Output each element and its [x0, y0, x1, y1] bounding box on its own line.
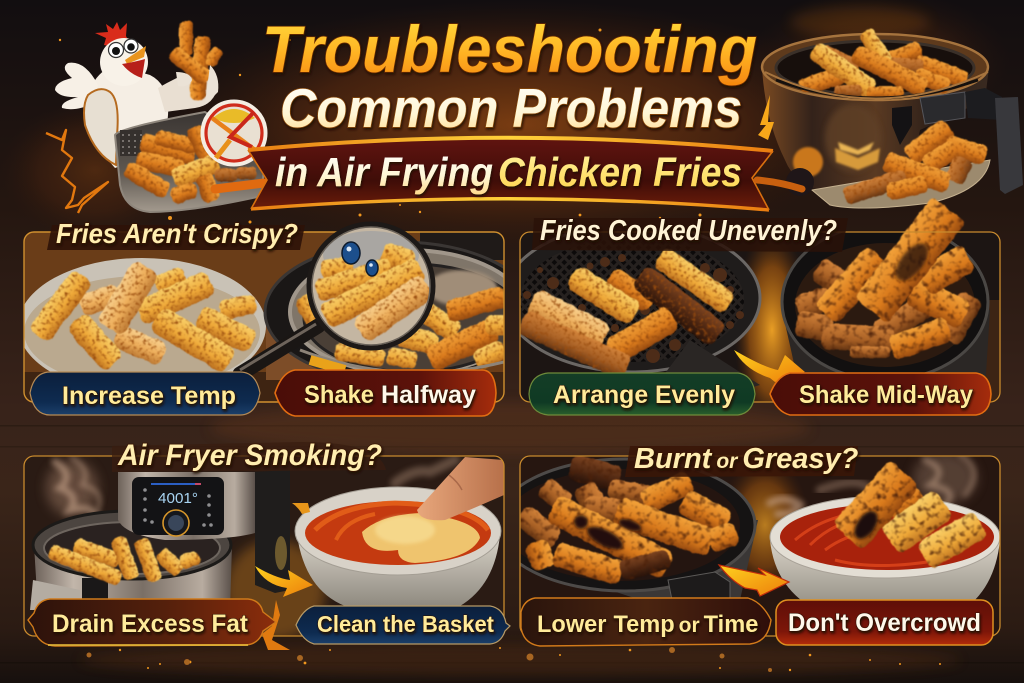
fire glow [738, 252, 796, 402]
smoke and glow [790, 6, 930, 38]
label: lower temp or time: Lower TemporTime [537, 612, 758, 638]
title: Troubleshooting [262, 12, 757, 86]
icon: prohibition sign [201, 100, 267, 166]
label: don't overcrowd: Don't Overcrowd [788, 609, 981, 637]
fries on plate [28, 260, 258, 374]
arrow: top to bowl [292, 503, 310, 514]
burnt fry ball on stick [757, 147, 823, 196]
tray [115, 112, 265, 212]
window reflection [825, 104, 881, 172]
arrow [734, 350, 805, 382]
panel image [520, 232, 1000, 402]
smoke [770, 452, 977, 514]
plate [812, 160, 990, 208]
label: increase temp [30, 372, 260, 415]
small arrow under label [262, 600, 290, 650]
bowl fries [832, 460, 988, 569]
label: arrange evenly [529, 373, 755, 415]
right column [255, 470, 290, 593]
bowl [295, 487, 501, 606]
label: arrange evenly: Arrange Evenly [553, 381, 735, 409]
heading: air fryer smoking: Air Fryer Smoking? [117, 439, 382, 472]
magnifier [240, 224, 435, 374]
banner text: Chicken Fries [498, 149, 742, 195]
steam from fryer [46, 458, 100, 516]
label: shake halfway: Halfway [381, 381, 476, 409]
stick left [215, 183, 264, 189]
basket bottom rim [300, 350, 504, 373]
label: shake halfway: Shake [304, 381, 374, 409]
steam behind bowl [395, 460, 455, 483]
label: shake halfway [275, 370, 496, 416]
spark bolt [758, 95, 774, 140]
label: drain excess fat: Drain Excess Fat [52, 610, 249, 638]
handle [892, 88, 1023, 194]
arrow: fryer to bowl [255, 566, 313, 597]
control head [118, 472, 255, 540]
banner [248, 138, 773, 210]
air fryer basket [264, 232, 504, 380]
label: increase temp: Increase Temp [62, 382, 236, 410]
panel image [24, 232, 504, 400]
title [262, 12, 757, 139]
basket [30, 511, 232, 610]
fries held by chicken [167, 21, 224, 101]
fryer fries [47, 535, 202, 587]
title: Common Problems [280, 77, 742, 139]
label: clean the basket [296, 606, 510, 644]
panel border [24, 232, 504, 402]
right basket [780, 233, 990, 377]
fryer body [762, 67, 989, 195]
label: shake mid-way [770, 373, 991, 415]
chicken body [55, 22, 218, 168]
label: clean the basket: Clean the Basket [317, 611, 494, 637]
crumbs [86, 647, 772, 672]
bowl [770, 496, 1000, 600]
rim [762, 34, 988, 100]
panel: fries cooked unevenly [519, 198, 1001, 416]
tray perforations [120, 130, 142, 156]
panel: air fryer smoking [24, 439, 510, 650]
panel image [24, 456, 504, 640]
left basket [520, 232, 762, 386]
panel border [24, 456, 504, 636]
lens fries [313, 241, 435, 343]
illustration: air fryer top right [757, 6, 1023, 208]
left basket fries [517, 246, 736, 380]
big fry overflowing panel [854, 197, 966, 323]
right basket fries [793, 244, 984, 360]
heading: fries cooked unevenly: Fries Cooked Unevenly? [540, 215, 837, 247]
tray fries [122, 123, 257, 205]
banner text [275, 149, 742, 195]
arrow [719, 565, 789, 596]
basket fries [798, 27, 969, 99]
bowl fry burn [852, 508, 880, 542]
banner text: in Air Frying [275, 149, 493, 195]
basket [520, 458, 758, 598]
brown beads [523, 254, 744, 363]
control head: 4001° [158, 490, 198, 507]
lens eyes [342, 242, 378, 276]
panel image [520, 456, 1000, 600]
rim front [776, 80, 978, 98]
panel border [520, 456, 1000, 636]
panel: burnt or greasy [495, 443, 1000, 646]
plate [24, 258, 266, 372]
flames left [46, 130, 108, 213]
label: shake mid-way: Shake Mid-Way [799, 381, 973, 409]
finger [417, 457, 504, 520]
golden glow [734, 476, 802, 578]
plate fries [842, 118, 989, 205]
panel: fries aren't crispy [18, 218, 535, 416]
chicken hand [176, 65, 218, 105]
heading: fries aren't crispy: Fries Aren't Crispy? [56, 218, 298, 249]
panel border [520, 232, 1000, 402]
label: drain excess fat [28, 599, 276, 646]
heading: burnt or greasy: BurntorGreasy? [634, 443, 859, 475]
burnt fries [513, 454, 740, 586]
burnt spots [574, 515, 643, 554]
basket fries [294, 285, 509, 372]
illustration: chicken mascot with tray [46, 21, 267, 213]
label: lower temp or time [521, 598, 771, 646]
label: don't overcrowd [776, 600, 993, 645]
